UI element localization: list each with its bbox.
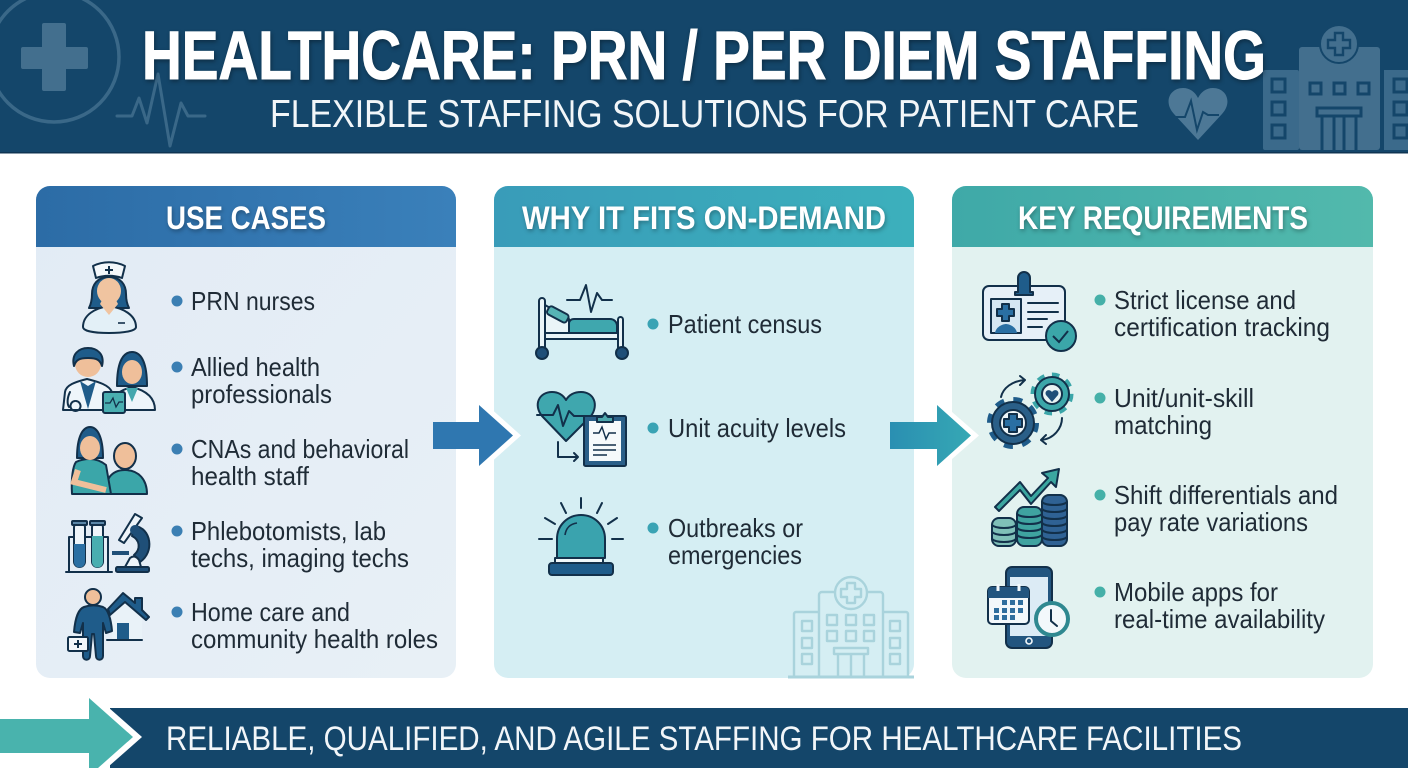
list: use cases: professionals [191, 379, 332, 409]
list: key requirements: Strict license and [1114, 285, 1296, 315]
icon: hospital [1263, 25, 1408, 150]
icon: ID badge [983, 272, 1076, 351]
icon: home care [68, 589, 149, 660]
icon: mobile calendar and clock [988, 567, 1068, 648]
icon: coins and growth arrow [992, 469, 1067, 546]
list: key requirements: Unit/unit-skill [1114, 383, 1254, 413]
heading: why it fits on-demand: WHY IT FITS ON-DEMAND [522, 200, 886, 236]
list: use cases: techs, imaging techs [191, 543, 409, 573]
list: use cases: community health roles [191, 624, 438, 654]
list: key requirements: Mobile apps for [1114, 577, 1278, 607]
list: use cases: health staff [191, 461, 310, 491]
list: use cases: PRN nurses [191, 286, 315, 316]
list: why it fits: Patient census [668, 309, 822, 339]
list: why it fits: Unit acuity levels [668, 413, 846, 443]
icon: allied health professionals [63, 348, 155, 413]
list: why it fits: emergencies [668, 540, 802, 570]
footer text: RELIABLE, QUALIFIED, AND AGILE STAFFING FOR HEALTHCARE FACILITIES [166, 720, 1242, 758]
icon: nurse [83, 262, 136, 333]
panel: use cases [36, 186, 456, 678]
icon: heartbeat line [117, 74, 205, 146]
list: key requirements: Shift differentials and [1114, 480, 1338, 510]
list: use cases: Home care and [191, 597, 350, 627]
heading: key requirements: KEY REQUIREMENTS [1018, 200, 1308, 236]
icon: lab tubes and microscope [66, 514, 149, 572]
header banner [0, 0, 1408, 154]
list: use cases [172, 286, 438, 654]
list: key requirements: certification tracking [1114, 312, 1330, 342]
subtitle: FLEXIBLE STAFFING SOLUTIONS FOR PATIENT CARE [270, 93, 1139, 136]
list: use cases: Phlebotomists, lab [191, 516, 386, 546]
footer banner [0, 698, 1408, 768]
heading: use cases: USE CASES [166, 200, 326, 236]
icon: hospital bed [536, 285, 628, 359]
list: key requirements: real-time availability [1114, 604, 1325, 634]
icon: hospital watermark [788, 577, 914, 677]
arrow: why it fits to key requirements [890, 398, 979, 473]
list: key requirements: pay rate variations [1114, 507, 1308, 537]
icon: CNA with patient [72, 427, 147, 494]
list: key requirements: matching [1114, 410, 1212, 440]
panel: key requirements [952, 186, 1373, 678]
icon: heart and clipboard [537, 392, 626, 466]
list: use cases: CNAs and behavioral [191, 434, 409, 464]
arrow: use cases to why it fits [433, 398, 521, 473]
panel: why it fits on-demand [494, 186, 914, 678]
arrow: footer [0, 698, 142, 768]
list: key requirements [1094, 285, 1338, 634]
icon: alarm beacon [539, 498, 623, 575]
icon: heart with pulse [1167, 88, 1227, 140]
icon: medical cross in circle [0, 0, 119, 122]
list: use cases: Allied health [191, 352, 320, 382]
icon: gears [991, 376, 1070, 445]
list: why it fits [648, 309, 846, 570]
list: why it fits: Outbreaks or [668, 513, 803, 543]
